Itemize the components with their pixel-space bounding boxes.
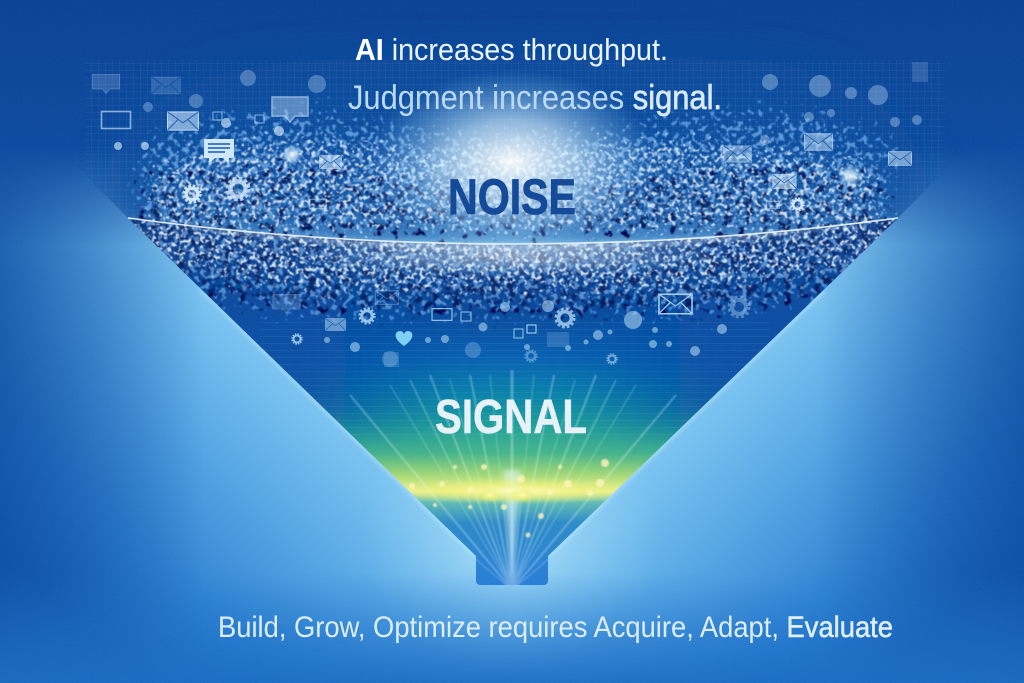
- sparkle left: [281, 144, 303, 166]
- envelopes: [724, 134, 912, 211]
- central noise glow: [367, 70, 657, 254]
- light rays: [349, 369, 677, 585]
- title line 1: AI increases throughput.: [355, 32, 668, 67]
- yellow glow band: [408, 458, 614, 538]
- funnel edge glow: [200, 288, 824, 556]
- cloud base: [100, 54, 930, 240]
- blue specks: [125, 100, 910, 240]
- NOISE label: NOISE: [448, 169, 576, 225]
- icons: right cloud: [724, 62, 928, 211]
- funnel particles: [129, 218, 898, 434]
- network dots: [324, 300, 727, 367]
- bottom caption: Build, Grow, Optimize requires Acquire, Adapt, Evaluate: [218, 611, 893, 644]
- mid icons: [102, 97, 326, 209]
- funnel gradient fill: [120, 210, 910, 590]
- faint icons: [92, 70, 326, 112]
- dark specks: [135, 160, 895, 240]
- title line 2: Judgment increases signal.: [348, 79, 722, 117]
- icon: heart: [396, 331, 412, 346]
- bright icons: [168, 112, 341, 202]
- icons: funnel: [273, 291, 749, 367]
- sparkle right: [838, 164, 862, 188]
- SIGNAL label: SIGNAL: [435, 391, 587, 444]
- icons: left cloud: [92, 70, 341, 209]
- noise cloud above funnel: [85, 54, 945, 240]
- cloud grid: [85, 60, 945, 230]
- funnel rim: [128, 218, 898, 278]
- white specks: [140, 129, 890, 240]
- funnel body: [110, 200, 910, 590]
- bright ray core: [503, 470, 521, 590]
- dollar coin and faint bubbles: [760, 62, 928, 145]
